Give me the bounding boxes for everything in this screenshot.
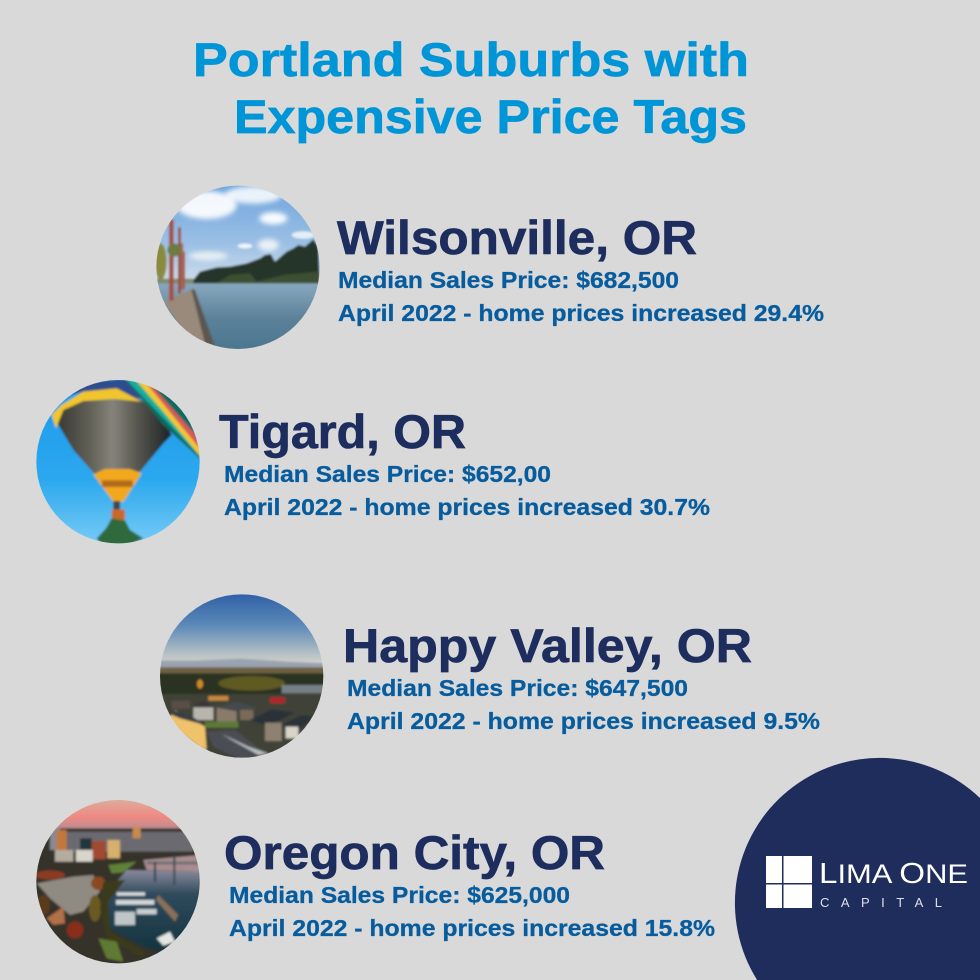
city block: Wilsonville: Wilsonville, OR [337,211,697,264]
title: Portland Suburbs with [193,33,749,86]
city block: Oregon City [224,826,715,941]
city block: Oregon City: Oregon City, OR [224,826,605,879]
title: Expensive Price Tags [234,90,747,143]
city block: Tigard: Tigard, OR [219,405,466,458]
city block: Tigard: April 2022 - home prices increased 30.7% [224,494,710,520]
title [193,33,749,143]
photo: Happy Valley neighbourhood [160,594,324,758]
photo: Tigard hot air balloon [36,380,200,544]
city block: Happy Valley: April 2022 - home prices increased 9.5% [347,708,820,734]
city block: Wilsonville [337,211,824,326]
icon: window squares [766,856,812,908]
city block: Oregon City: April 2022 - home prices increased 15.8% [229,915,715,941]
city block: Tigard: Median Sales Price: $652,00 [224,461,551,487]
city block: Happy Valley [343,619,820,734]
photo: Oregon City riverfront [36,800,200,964]
city block: Happy Valley: Happy Valley, OR [343,619,752,672]
photo: Wilsonville lake and dock [156,186,320,349]
city block: Oregon City: Median Sales Price: $625,000 [229,882,570,908]
city block: Tigard [219,405,710,520]
logo badge: Lima One Capital [735,758,980,980]
logo wordmark: LIMA ONE [819,858,968,890]
city block: Happy Valley: Median Sales Price: $647,500 [347,675,688,701]
city block: Wilsonville: April 2022 - home prices increased 29.4% [338,300,824,326]
logo subline: CAPITAL [820,895,942,910]
city block: Wilsonville: Median Sales Price: $682,500 [338,267,679,293]
